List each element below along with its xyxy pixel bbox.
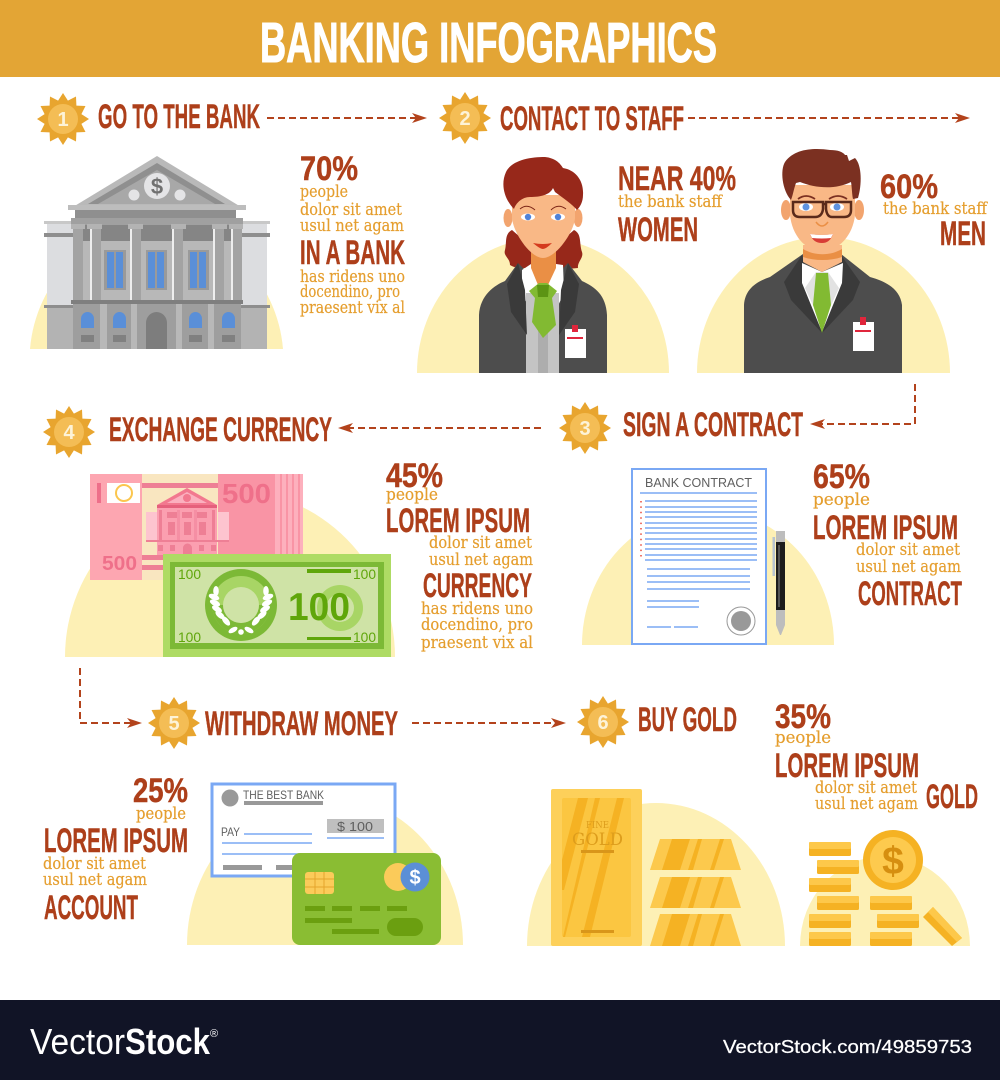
panel: contract illustration: BANK CONTRACT (645, 475, 752, 490)
text block: 70% in a bank: usul net agam (300, 216, 404, 235)
text block: 70% in a bank: IN A BANK (300, 234, 405, 272)
text block: 45% currency: docendino, pro (421, 615, 533, 634)
text block: 60% men: 60% (880, 168, 938, 206)
badge 1 (37, 93, 89, 145)
text block: 45% currency: dolor sit amet (429, 533, 532, 552)
text block: 45% currency: has ridens uno (421, 599, 533, 618)
panel: gold coins illustration (800, 830, 970, 946)
heading: go to the bank: GO TO THE BANK (98, 98, 260, 136)
text block: 65% contract: people (813, 490, 870, 509)
text block: 65% contract: usul net agam (856, 557, 961, 576)
panel: bank illustration (30, 156, 283, 349)
arrow 1 to 2 (267, 113, 427, 123)
badge 6: 6 (597, 712, 609, 734)
text block: 25% account: 25% (133, 772, 188, 810)
panel: banknotes illustration: 100 (288, 586, 350, 629)
badge 2 (439, 92, 491, 144)
arrow to the right (688, 113, 970, 123)
panel: cheque and credit card illustration: PAY (221, 825, 240, 839)
text block: 35% gold (775, 698, 978, 816)
text block: 25% account: ACCOUNT (44, 889, 138, 927)
text block: 25% account (43, 772, 188, 927)
badge 1: 1 (57, 109, 69, 131)
text block: 35% gold: usul net agam (815, 794, 918, 813)
header band with title (0, 0, 1000, 77)
text block: 25% account: usul net agam (43, 870, 147, 889)
badge 3 (559, 402, 611, 454)
text block: 65% contract: 65% (813, 458, 870, 496)
heading: withdraw money: WITHDRAW MONEY (205, 705, 398, 743)
panel: gold bullion illustration (527, 789, 785, 946)
badge 4 (43, 406, 95, 458)
panel: cheque and credit card illustration (187, 784, 463, 945)
badge 4: 4 (63, 422, 75, 444)
panel: banknotes illustration: 500 (102, 553, 137, 575)
footer watermark bar: ® (210, 1028, 218, 1040)
badge 2: 2 (459, 108, 471, 130)
text block: 70% in a bank: praesent vix al (300, 298, 405, 317)
text block: 25% account: people (136, 804, 186, 823)
text block: 70% in a bank: people (300, 182, 348, 201)
text block: 70% in a bank: docendino, pro (300, 282, 400, 301)
text block: 70% in a bank: dolor sit amet (300, 200, 402, 219)
text block: 45% currency: usul net agam (429, 550, 533, 569)
panel: bank clerk man (697, 149, 950, 373)
panel: gold bullion illustration: FINE (586, 821, 609, 831)
panel: banknotes illustration: 100 (353, 629, 376, 645)
arrow 5 to 6 (412, 718, 566, 728)
heading: sign a contract: SIGN A CONTRACT (623, 406, 803, 444)
text block: 45% currency: 45% (386, 457, 443, 495)
text block: 45% currency: LOREM IPSUM (386, 502, 530, 540)
heading: contact to staff: CONTACT TO STAFF (500, 100, 684, 138)
text block: near 40% women: WOMEN (618, 211, 698, 249)
text block: near 40% women: the bank staff (618, 192, 723, 211)
text block: 25% account: dolor sit amet (43, 854, 146, 873)
text block: 45% currency: people (386, 485, 438, 504)
badge 3: 3 (579, 418, 591, 440)
text block: 45% currency (386, 457, 533, 652)
footer watermark bar: Stock (125, 1021, 211, 1062)
panel: banknotes illustration: 100 (178, 629, 201, 645)
header band with title: BANKING INFOGRAPHICS (260, 11, 717, 75)
badge 5 (148, 697, 200, 749)
text block: 45% currency: CURRENCY (423, 567, 532, 605)
panel: banknotes illustration: 500 (222, 478, 271, 509)
arrow down to step 5 (80, 668, 142, 728)
heading: exchange currency: EXCHANGE CURRENCY (109, 411, 332, 449)
arrow 3 to 4 (338, 423, 541, 433)
panel: banknotes illustration (65, 474, 395, 657)
text block: 65% contract (813, 458, 962, 613)
footer watermark bar: Vector (30, 1021, 125, 1062)
text block: near 40% women: NEAR 40% (618, 160, 736, 198)
text block: 25% account: LOREM IPSUM (44, 822, 188, 860)
text block: 70% in a bank: has ridens uno (300, 267, 405, 286)
arrow down and left to step 3 (810, 384, 915, 429)
footer watermark bar (0, 1000, 1000, 1080)
text block: 35% gold: dolor sit amet (815, 778, 917, 797)
text block: 35% gold: 35% (775, 698, 831, 736)
footer watermark bar: VectorStock.com/49859753 (723, 1037, 972, 1057)
text block: 35% gold: people (775, 728, 831, 747)
badge 6 (577, 696, 629, 748)
text block: 70% in a bank: 70% (300, 150, 358, 188)
panel: cheque and credit card illustration: $ 100 (337, 819, 373, 834)
text block: 70% in a bank (300, 150, 405, 317)
panel: gold coins illustration: $ (882, 840, 904, 883)
panel: banknotes illustration: 100 (353, 566, 376, 582)
text block: 60% men (880, 168, 988, 253)
text block: 65% contract: dolor sit amet (856, 540, 960, 559)
panel: cheque and credit card illustration: $ (409, 867, 421, 889)
panel: contract illustration (582, 469, 834, 645)
heading: buy gold: BUY GOLD (638, 701, 737, 739)
text block: near 40% women (618, 160, 736, 249)
panel: bank clerk woman (417, 157, 669, 373)
badge 5: 5 (168, 713, 180, 735)
text block: 60% men: the bank staff (883, 199, 988, 218)
panel: banknotes illustration: 100 (178, 566, 201, 582)
text block: 45% currency: praesent vix al (421, 633, 533, 652)
panel: cheque and credit card illustration: THE BEST BANK (243, 788, 324, 802)
panel: gold bullion illustration: GOLD (572, 830, 623, 850)
panel: bank illustration: $ (151, 174, 163, 199)
